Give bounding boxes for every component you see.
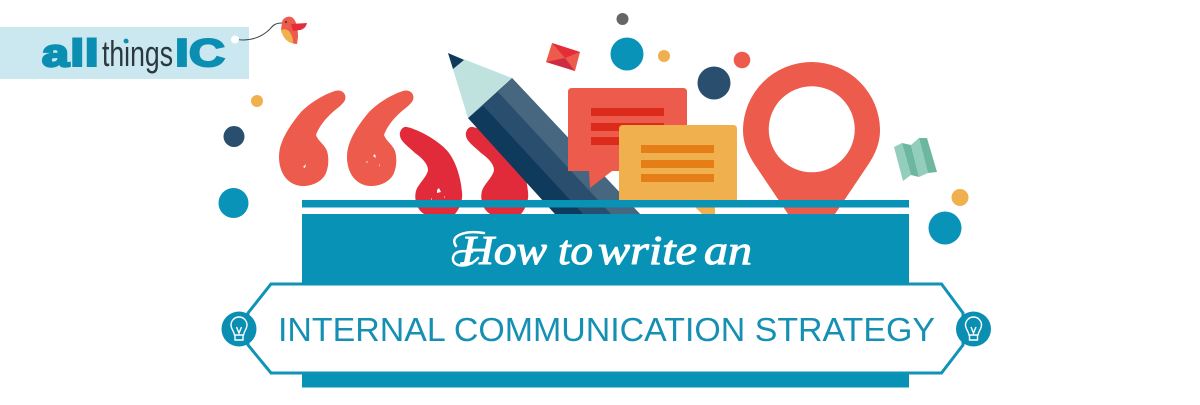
heading: how to write an: to — [558, 227, 593, 273]
logo tag — [0, 27, 249, 79]
decorative dots top — [610, 13, 750, 100]
ribbon banner — [248, 284, 963, 373]
icon: coral speech bubble — [568, 88, 687, 188]
heading: how to write an: an — [704, 227, 752, 273]
bottom band — [302, 370, 909, 388]
icon: right lightbulb — [956, 312, 991, 346]
logo wordmark: ll — [70, 33, 99, 75]
decorative dots left — [218, 95, 263, 218]
icon: location pin — [743, 62, 880, 214]
heading: how to write an: How — [460, 227, 548, 273]
logo wordmark — [42, 32, 225, 75]
heading: how to write an: write — [598, 227, 697, 273]
icon: envelope — [546, 43, 580, 71]
logo wordmark: things — [102, 33, 173, 74]
heading: internal communication strategy: INTERNAL COMMUNICATION STRATEGY — [278, 311, 935, 348]
icon: pencil — [448, 53, 640, 214]
icon: bird on a string — [239, 17, 307, 44]
logo wordmark: a — [42, 33, 70, 75]
top strip — [302, 200, 909, 208]
heading: how to write an — [453, 227, 752, 273]
icon: orange speech bubble — [619, 125, 737, 214]
icon: opening quote marks — [279, 91, 413, 186]
icon: closing quote marks — [400, 127, 528, 214]
icon: folded map — [894, 138, 937, 181]
icon: left lightbulb — [222, 312, 256, 346]
main teal band — [302, 214, 909, 285]
logo wordmark: IC — [175, 32, 225, 75]
decorative dots right — [928, 189, 968, 244]
